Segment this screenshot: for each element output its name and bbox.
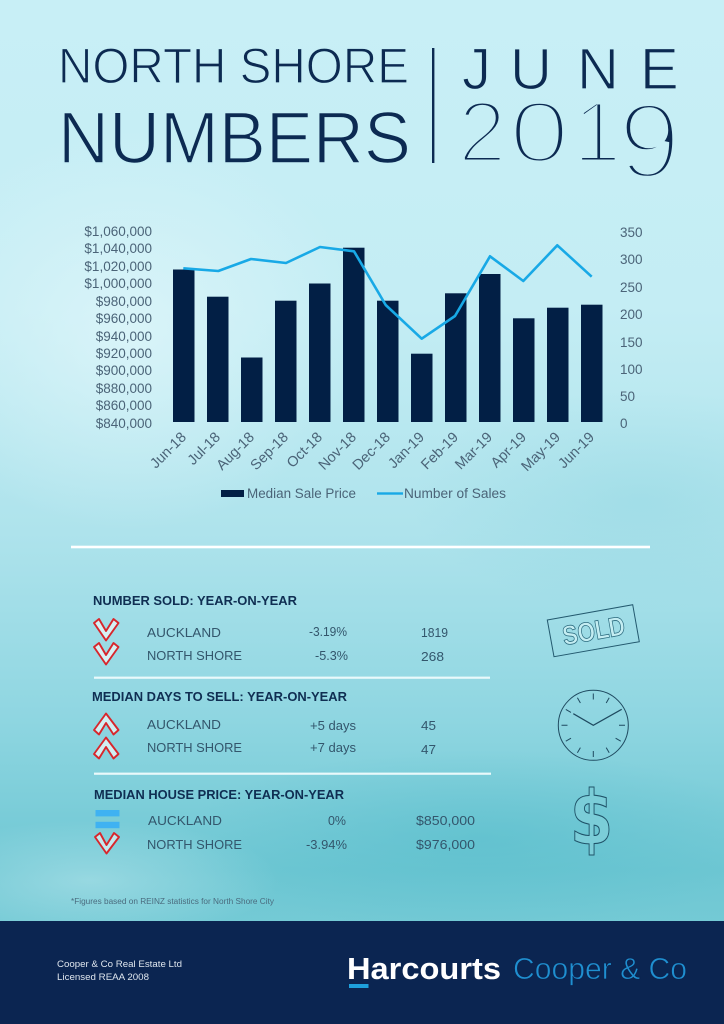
footnote: *Figures based on REINZ statistics for North Shore City bbox=[71, 896, 275, 906]
row: North Shore: -5.3% bbox=[315, 648, 348, 663]
row: Auckland: 0% bbox=[328, 813, 346, 828]
title divider bbox=[432, 48, 434, 163]
left axis labels: $1,000,000 bbox=[84, 276, 152, 291]
left axis labels bbox=[84, 224, 152, 431]
left axis labels: $1,040,000 bbox=[84, 241, 152, 256]
row: Auckland: AUCKLAND bbox=[147, 717, 221, 732]
row: North Shore bbox=[147, 740, 436, 757]
date: June: J bbox=[462, 37, 491, 102]
month labels bbox=[147, 430, 598, 475]
left axis labels: $860,000 bbox=[96, 398, 152, 413]
icon: dollar sign: $ bbox=[570, 776, 613, 862]
month labels: Nov-18 bbox=[316, 430, 360, 474]
row: North Shore: 47 bbox=[421, 742, 436, 757]
right axis labels: 100 bbox=[620, 362, 643, 377]
icon: equal sign bbox=[96, 810, 120, 828]
combo chart: median sale price and number of sales bbox=[84, 224, 643, 501]
date: June: E bbox=[640, 37, 679, 102]
row: North Shore: NORTH SHORE bbox=[147, 837, 242, 852]
month labels: Mar-19 bbox=[452, 430, 496, 473]
right axis labels: 200 bbox=[620, 307, 643, 322]
right axis labels: 250 bbox=[620, 280, 643, 295]
row: North Shore: NORTH SHORE bbox=[147, 648, 242, 663]
left axis labels: $1,060,000 bbox=[84, 224, 152, 239]
row: North Shore: NORTH SHORE bbox=[147, 740, 242, 755]
heading: median price: MEDIAN HOUSE PRICE: YEAR-ON-YEAR bbox=[94, 788, 344, 802]
right axis labels bbox=[620, 225, 643, 431]
date: 2019: 1 bbox=[573, 84, 621, 181]
left axis labels: $940,000 bbox=[96, 329, 152, 344]
row: North Shore bbox=[147, 837, 475, 852]
icon: double up arrows bbox=[94, 714, 118, 758]
chart legend: Number of Sales bbox=[404, 486, 506, 501]
icon: down arrow bbox=[95, 833, 119, 854]
right axis labels: 150 bbox=[620, 335, 643, 350]
date: 2019: 0 bbox=[509, 83, 569, 181]
heading: number sold: NUMBER SOLD: YEAR-ON-YEAR bbox=[93, 594, 297, 608]
row: Auckland: +5 days bbox=[310, 718, 356, 733]
row: Auckland: 45 bbox=[421, 718, 436, 733]
month labels: Feb-19 bbox=[418, 430, 462, 473]
row: North Shore bbox=[147, 648, 444, 664]
icon: clock bbox=[558, 690, 628, 760]
title: North Shore Numbers bbox=[58, 38, 411, 179]
footer band bbox=[0, 921, 724, 1024]
heading: median days: MEDIAN DAYS TO SELL: YEAR-ON-YEAR bbox=[92, 690, 347, 704]
left axis labels: $840,000 bbox=[96, 416, 152, 431]
chart legend: Median Sale Price bbox=[247, 486, 356, 501]
row: North Shore: $976,000 bbox=[416, 837, 475, 852]
left axis labels: $980,000 bbox=[96, 294, 152, 309]
right axis labels: 300 bbox=[620, 252, 643, 267]
row: Auckland: -3.19% bbox=[309, 624, 347, 639]
month labels: Apr-19 bbox=[488, 430, 530, 471]
month labels: May-19 bbox=[519, 430, 564, 475]
panel divider bbox=[94, 773, 491, 775]
month labels: Jun-18 bbox=[147, 430, 190, 472]
left axis labels: $960,000 bbox=[96, 311, 152, 326]
month labels: Jun-19 bbox=[555, 430, 598, 472]
logo: Harcourts: Harcourts bbox=[347, 951, 501, 986]
right axis labels: 0 bbox=[620, 416, 628, 431]
row: North Shore: 268 bbox=[421, 649, 444, 664]
icon: sold stamp: SOLD bbox=[560, 611, 627, 651]
month labels: Jan-19 bbox=[385, 430, 428, 472]
footer: company details bbox=[57, 959, 182, 983]
chart legend bbox=[221, 486, 506, 501]
date: 2019: 9 bbox=[618, 81, 681, 201]
left axis labels: $900,000 bbox=[96, 363, 152, 378]
panel: number sold bbox=[93, 594, 448, 664]
date: June bbox=[462, 37, 679, 102]
section divider bbox=[71, 546, 650, 548]
panel: median house price bbox=[94, 788, 475, 854]
right axis labels: 50 bbox=[620, 389, 635, 404]
month labels: Sep-18 bbox=[248, 430, 292, 474]
row: Auckland: AUCKLAND bbox=[148, 813, 222, 828]
month labels: Oct-18 bbox=[284, 430, 326, 471]
month labels: Dec-18 bbox=[350, 430, 394, 474]
left axis labels: $880,000 bbox=[96, 381, 152, 396]
row: North Shore: -3.94% bbox=[306, 837, 347, 852]
title: North Shore Numbers: NUMBERS bbox=[58, 98, 411, 179]
panel: median days to sell bbox=[92, 690, 436, 758]
footer: company details: Licensed REAA 2008 bbox=[57, 972, 149, 983]
row: Auckland: $850,000 bbox=[416, 813, 475, 828]
row: Auckland bbox=[148, 813, 475, 828]
row: Auckland: AUCKLAND bbox=[147, 625, 221, 640]
row: Auckland: 1819 bbox=[421, 625, 448, 640]
date: 2019: 2 bbox=[458, 84, 506, 181]
footer: company details: Cooper & Co Real Estate Ltd bbox=[57, 959, 182, 970]
month labels: Aug-18 bbox=[214, 430, 258, 474]
row: North Shore: +7 days bbox=[310, 740, 356, 755]
title: North Shore Numbers: NORTH SHORE bbox=[58, 38, 409, 94]
date: 2019 bbox=[458, 81, 681, 201]
left axis labels: $920,000 bbox=[96, 346, 152, 361]
left axis labels: $1,020,000 bbox=[84, 259, 152, 274]
bars: median sale price bbox=[173, 248, 602, 422]
logo: Cooper & Co: Cooper & Co bbox=[513, 951, 687, 986]
icon: double down arrows bbox=[94, 619, 118, 664]
right axis labels: 350 bbox=[620, 225, 643, 240]
date: June: U bbox=[510, 37, 552, 102]
month labels: Jul-18 bbox=[185, 430, 224, 469]
date: June: N bbox=[577, 37, 619, 102]
row: Auckland bbox=[147, 717, 436, 733]
row: Auckland bbox=[147, 624, 448, 640]
panel divider bbox=[94, 677, 490, 679]
line: number of sales bbox=[183, 245, 592, 339]
